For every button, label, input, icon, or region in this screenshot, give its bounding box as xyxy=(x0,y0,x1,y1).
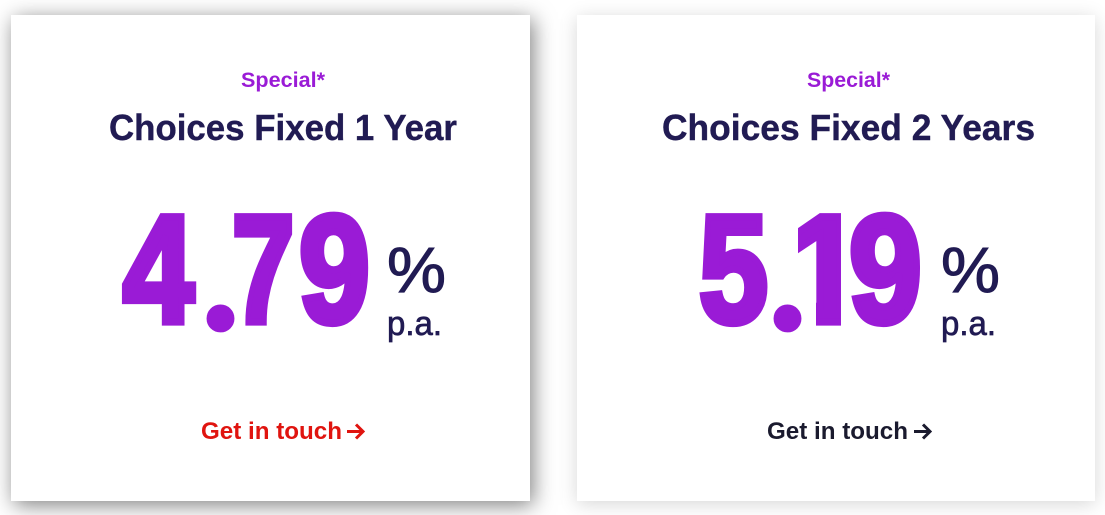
big rate 5.19: 5 xyxy=(699,184,768,355)
big rate 5.19: 1 xyxy=(786,183,866,355)
big rate 5.19: . xyxy=(766,178,809,368)
percent sign: % xyxy=(941,234,1000,306)
icon: arrow xyxy=(347,424,363,438)
panel: card background 2 years xyxy=(577,15,1095,501)
label: Special: Special* xyxy=(241,69,326,92)
big rate 5.19: 9 xyxy=(849,184,922,355)
panel: Choices Fixed 2 Years xyxy=(662,69,1035,445)
link: Get in touch: Get in touch xyxy=(767,418,908,445)
percent sign: % xyxy=(387,234,446,306)
rate cards content xyxy=(110,72,1034,440)
link: Get in touch: Get in touch xyxy=(201,418,342,445)
big rate 5.19 xyxy=(699,212,920,332)
per annum label: p.a. xyxy=(387,305,442,343)
big rate 4.79: . xyxy=(199,178,242,368)
per annum label: p.a. xyxy=(941,305,996,343)
big rate 4.79: 7 xyxy=(232,185,294,355)
big rate 4.79: 4 xyxy=(123,184,194,355)
icon: arrow xyxy=(914,424,930,438)
panel: Choices Fixed 1 Year xyxy=(109,69,457,445)
heading: Choices Fixed 2 Years: Choices Fixed 2 Years xyxy=(662,107,1035,148)
heading: Choices Fixed 1 Year: Choices Fixed 1 Year xyxy=(109,107,457,148)
panel: card background 1 year xyxy=(11,15,530,501)
label: Special: Special* xyxy=(807,69,891,92)
big rate 4.79 xyxy=(123,178,370,368)
big rate 4.79: 9 xyxy=(299,184,370,355)
